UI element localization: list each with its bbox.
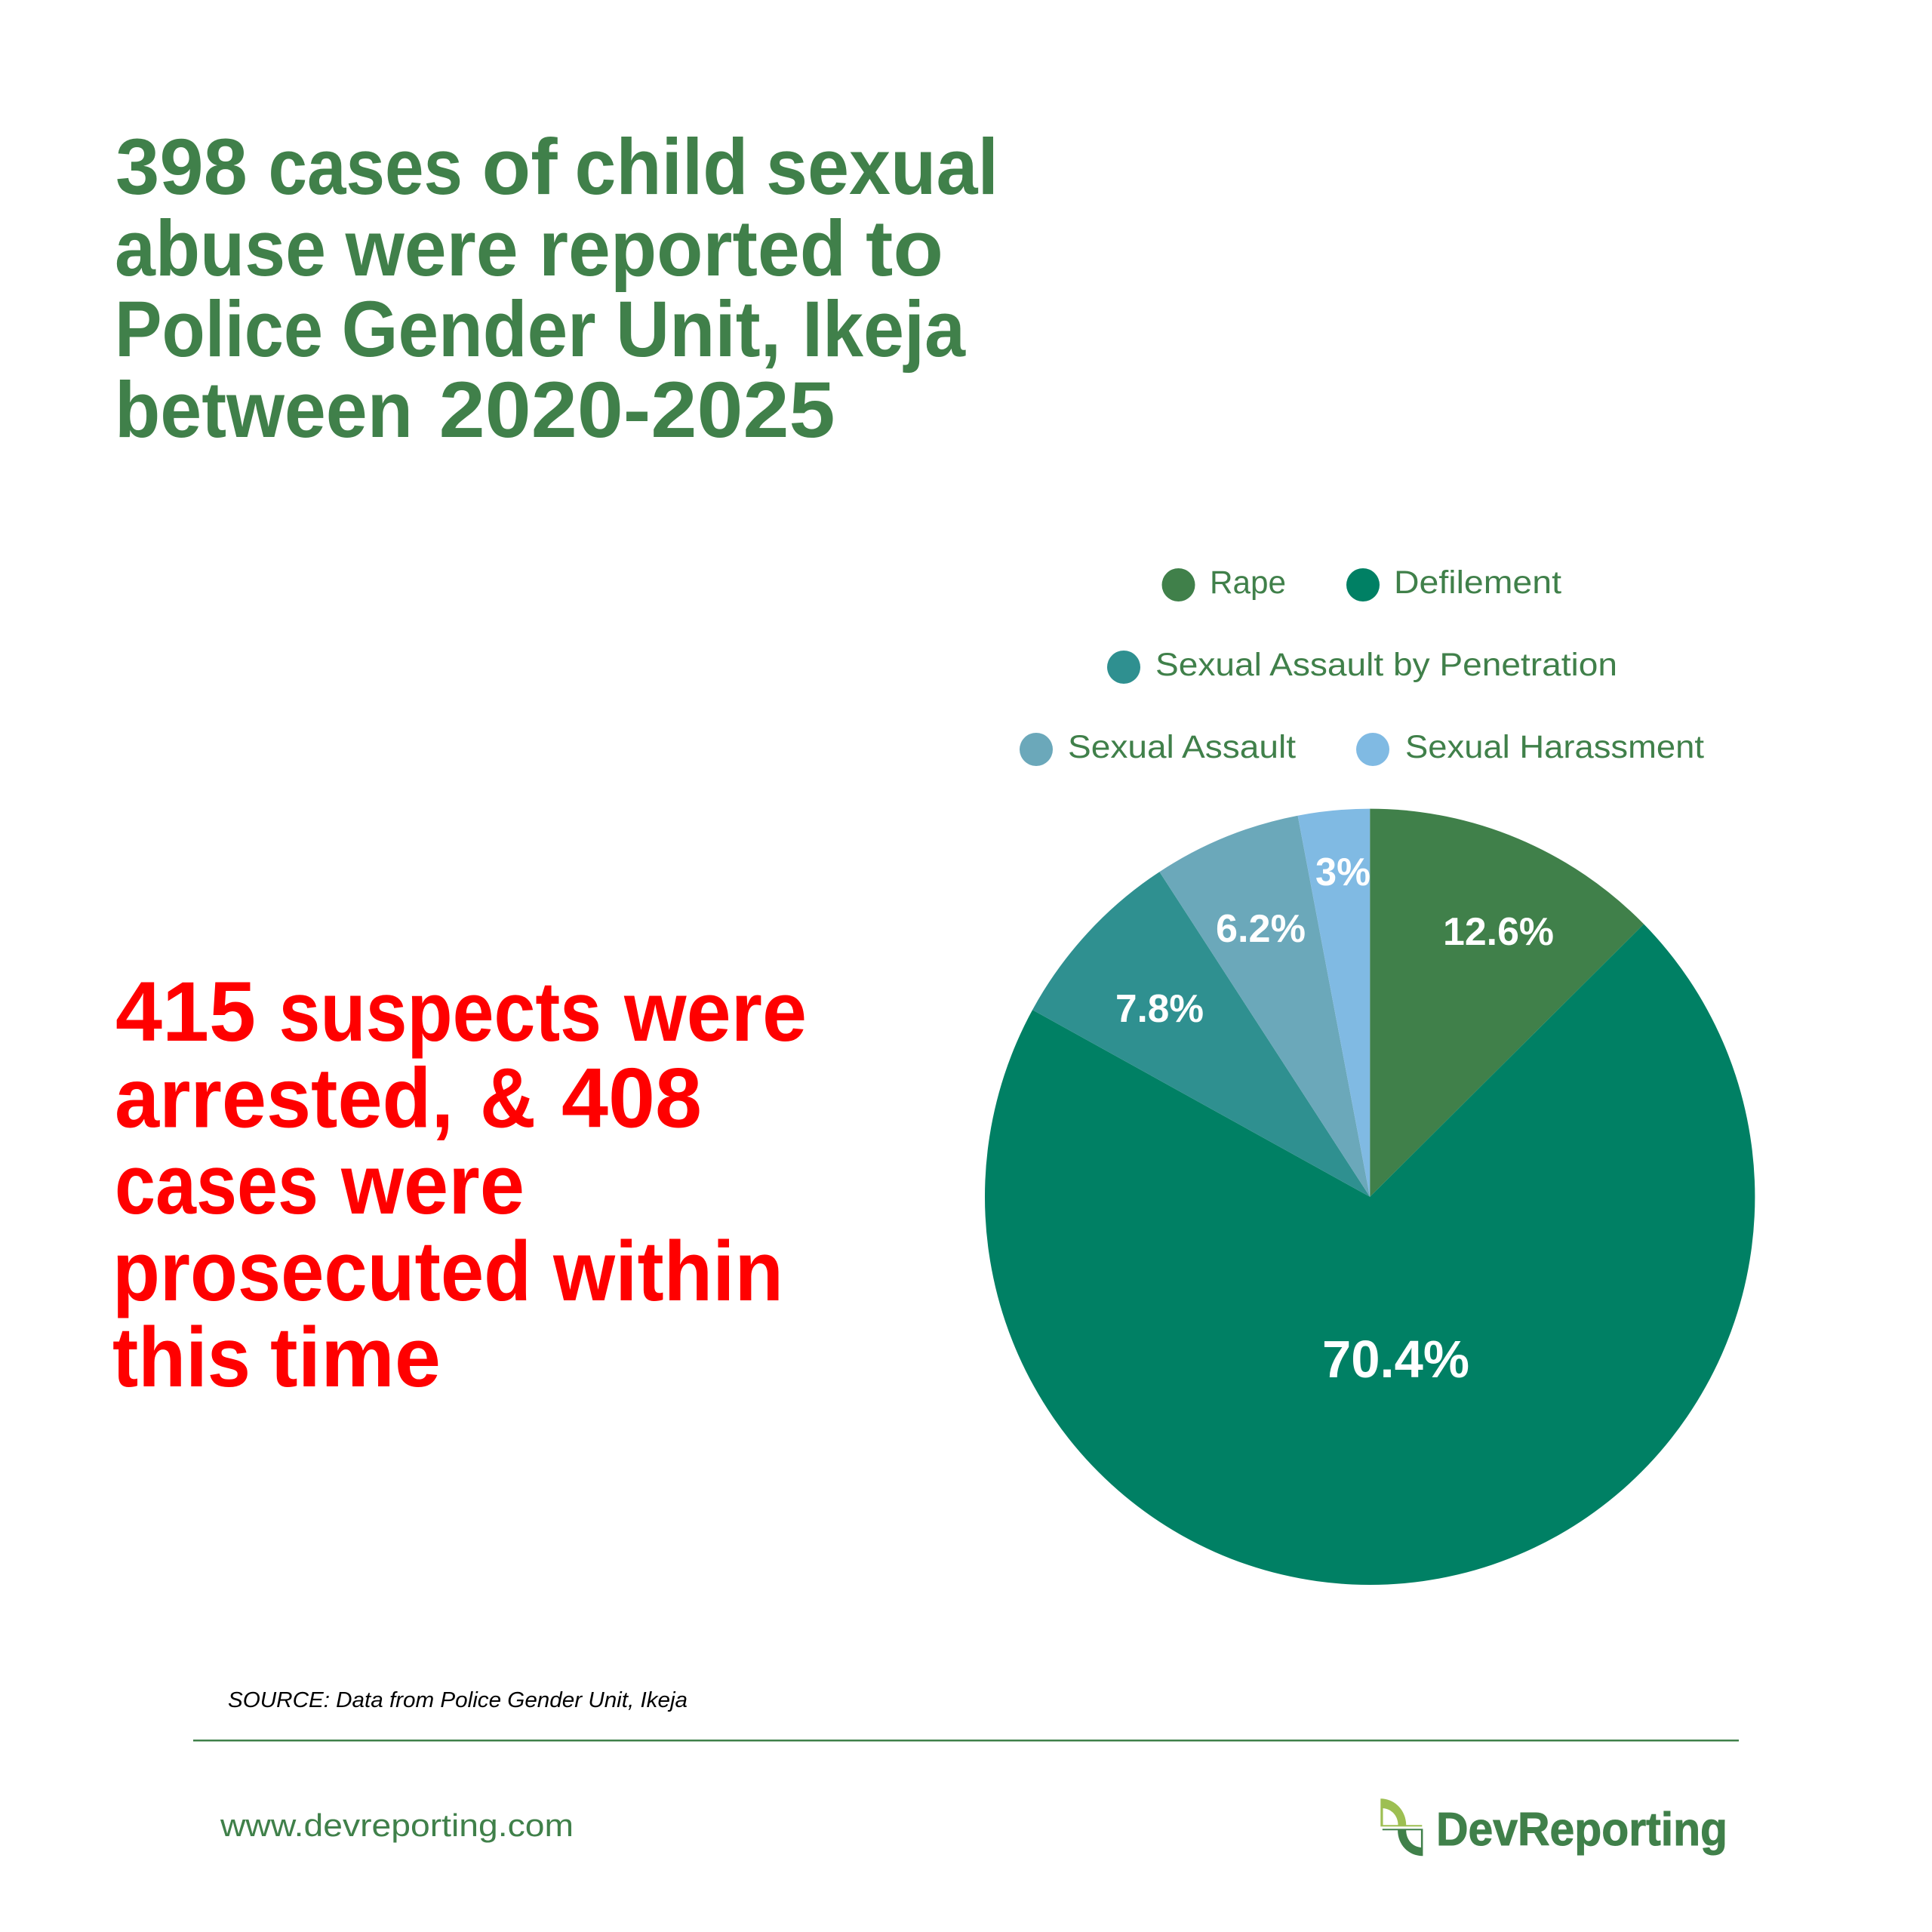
logo wordmark: DevReporting: [1436, 1804, 1727, 1856]
title: sexual: [766, 123, 998, 211]
title: [115, 123, 998, 454]
title: to: [866, 205, 943, 293]
legend: [1020, 565, 1704, 766]
callout: suspects and prosecutions: prosecuted: [112, 1224, 531, 1318]
value labels: 7.8%: [1115, 987, 1204, 1031]
slice: Sexual Assault by Penetration 7.8%: [1032, 872, 1370, 1197]
legend item: Rape: [1162, 565, 1286, 601]
slice: Sexual Assault 6.2%: [1159, 816, 1370, 1197]
value labels: [1115, 851, 1554, 1389]
title: between: [115, 366, 413, 454]
value labels: 6.2%: [1216, 907, 1306, 951]
title: 2020-2025: [439, 366, 835, 454]
legend item: Defilement: Defilement: [1394, 565, 1561, 601]
slice: Rape 12.6%: [1370, 809, 1644, 1197]
callout: suspects and prosecutions: [112, 964, 807, 1404]
callout: suspects and prosecutions: were: [623, 964, 807, 1059]
callout: suspects and prosecutions: 408: [561, 1051, 702, 1146]
title: were: [345, 205, 518, 293]
pie chart: [985, 809, 1755, 1585]
title: 398: [115, 123, 248, 211]
callout: suspects and prosecutions: &: [480, 1051, 536, 1146]
title: child: [575, 123, 749, 211]
slice: Defilement 70.4%: [985, 924, 1755, 1585]
callout: suspects and prosecutions: suspects: [279, 964, 601, 1059]
legend item: Sexual Assault by Penetration: Sexual Assault by Penetration: [1155, 647, 1617, 683]
website url: www.devreporting.com: [220, 1807, 574, 1843]
callout: suspects and prosecutions: arrested,: [115, 1051, 454, 1146]
slice: Sexual Harassment 3%: [1298, 809, 1370, 1197]
legend item: Rape: Rape: [1210, 565, 1286, 601]
logo: DevReporting: [1380, 1798, 1727, 1856]
value labels: 3%: [1315, 851, 1371, 894]
title: Unit,: [616, 285, 781, 374]
logo mark: [1380, 1798, 1423, 1856]
callout: suspects and prosecutions: cases: [115, 1137, 318, 1232]
value labels: 70.4%: [1322, 1330, 1469, 1389]
title: reported: [539, 205, 846, 293]
title: abuse: [115, 205, 326, 293]
title: Ikeja: [802, 285, 966, 374]
title: of: [481, 123, 558, 211]
callout: suspects and prosecutions: were: [340, 1137, 525, 1232]
source note: SOURCE: Data from Police Gender Unit, Ikeja: [228, 1688, 688, 1712]
callout: suspects and prosecutions: within: [552, 1224, 783, 1318]
title: cases: [269, 123, 463, 211]
callout: suspects and prosecutions: time: [270, 1310, 441, 1404]
callout: suspects and prosecutions: this: [112, 1310, 251, 1404]
value labels: 12.6%: [1443, 910, 1554, 954]
callout: suspects and prosecutions: 415: [115, 964, 256, 1059]
legend item: Sexual Assault: Sexual Assault: [1068, 729, 1296, 765]
legend item: Sexual Harassment: Sexual Harassment: [1405, 729, 1704, 765]
title: Gender: [342, 285, 596, 374]
title: Police: [115, 285, 323, 374]
